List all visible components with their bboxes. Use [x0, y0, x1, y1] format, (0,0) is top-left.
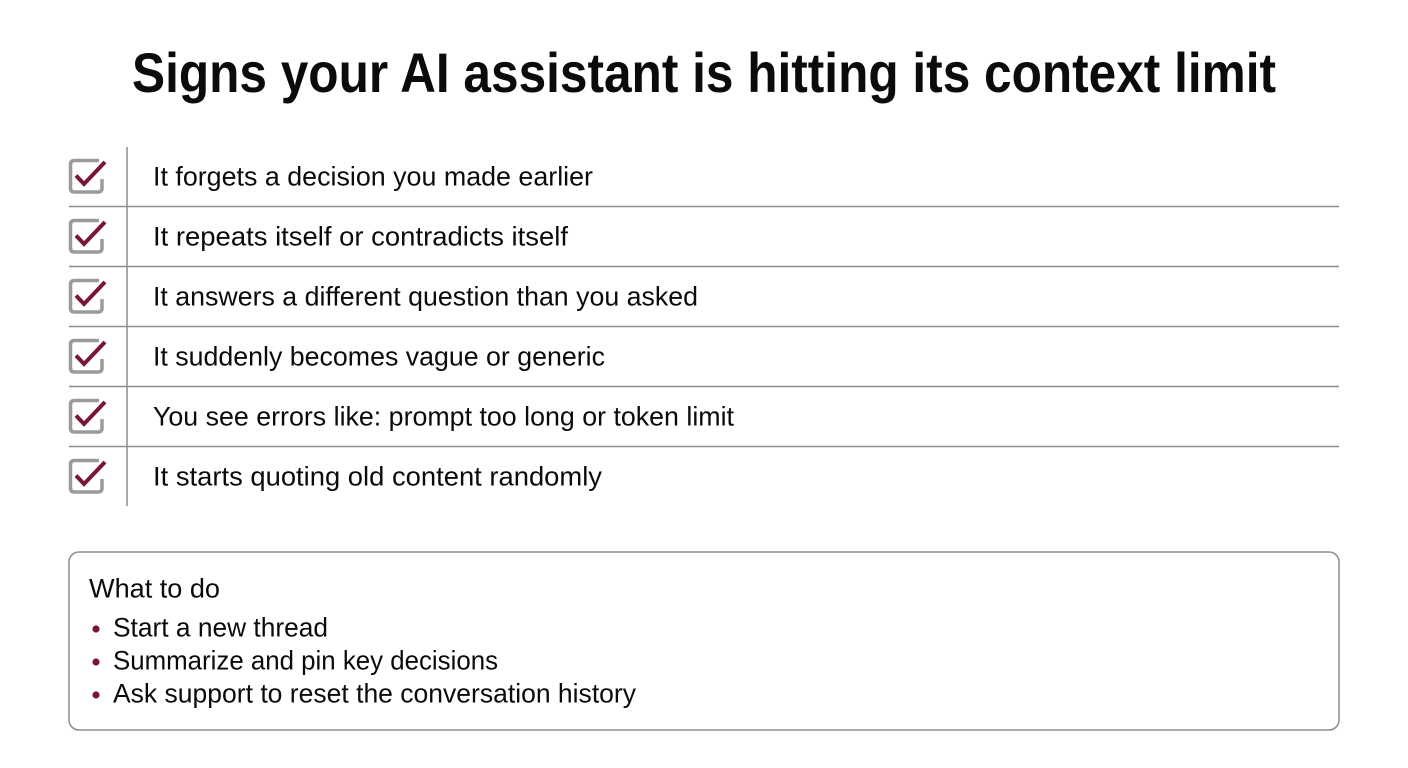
panel heading: What to do [89, 574, 220, 604]
action: summarize: Summarize and pin key decisions [113, 646, 498, 676]
action: new thread: Start a new thread [113, 612, 328, 642]
row 5: errors: You see errors like: prompt too long or token limit [153, 402, 734, 432]
title: Signs your AI assistant is hitting its context limit [132, 41, 1276, 104]
checklist [69, 147, 1339, 506]
row 6: quoting: It starts quoting old content randomly [153, 462, 603, 492]
row 4: vague: It suddenly becomes vague or generic [153, 342, 605, 372]
row 3: different question: It answers a different question than you asked [153, 282, 698, 312]
action: reset history: Ask support to reset the conversation history [113, 678, 636, 708]
row 2: repeats: It repeats itself or contradicts itself [153, 222, 568, 252]
panel: what to do [69, 552, 1339, 730]
row 1: decision: It forgets a decision you made earlier [153, 162, 593, 192]
